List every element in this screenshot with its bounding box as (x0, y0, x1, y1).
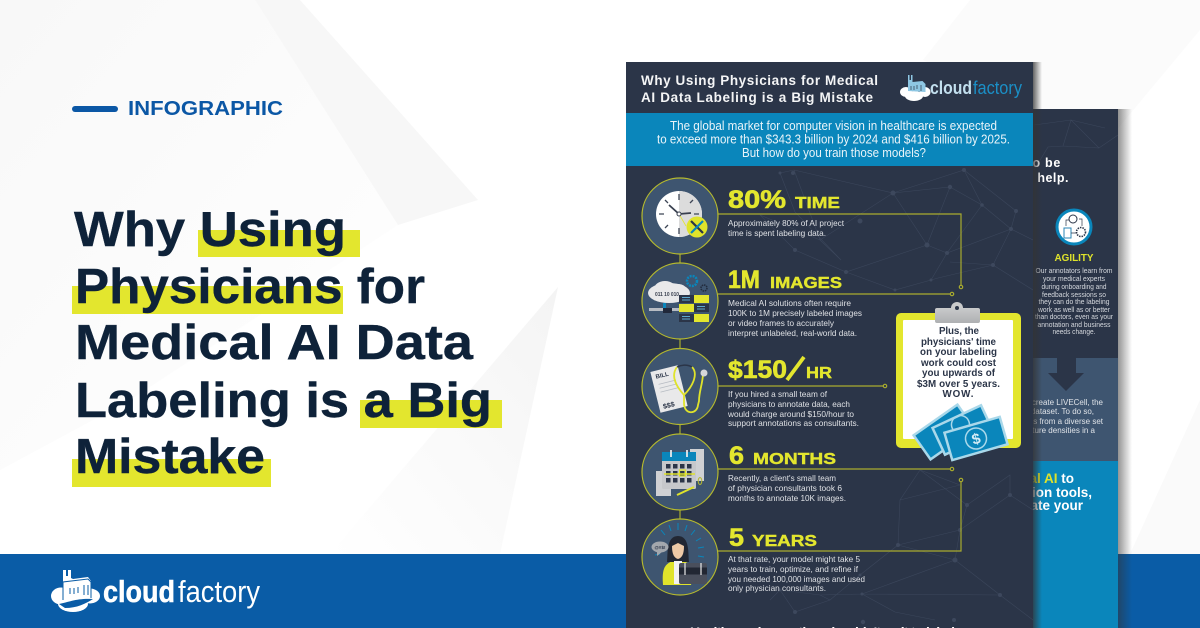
back page arrow section: dataset. To do so, (1031, 407, 1094, 416)
callout text: Plus, the (939, 326, 980, 337)
back page arrow section: s create LIVECell, the (1026, 398, 1104, 407)
agility text: feedback sessions so (1042, 290, 1106, 299)
icon: cloud and servers: 011 10 010 (655, 292, 679, 298)
main title with highlights: Physicians for (75, 260, 425, 314)
icon: dollar bills: $ (970, 430, 983, 449)
callout text: on your labeling (920, 347, 997, 358)
network pattern (760, 170, 1033, 620)
icon: bill and stethoscope: BILL (655, 372, 670, 381)
callout text: work could cost (920, 358, 997, 369)
item 1: 80% time (642, 178, 845, 254)
item 4: 6 months: of physician consultants took 6 (728, 483, 842, 493)
item 5: 5 years: only physician consultants. (728, 583, 826, 593)
main title with highlights (72, 203, 502, 487)
item 1: 80% time: 80% (728, 186, 786, 214)
agility text: during onboarding and (1042, 282, 1106, 291)
item 5: 5 years: 5 (729, 524, 744, 552)
intro band (626, 113, 1033, 166)
agility text: Our annotators learn from (1036, 266, 1112, 275)
icon: dollar bills (912, 403, 1009, 462)
agility text: annotation and business (1038, 320, 1111, 329)
item 4: 6 months: 6 (729, 442, 744, 470)
item 4: 6 months (642, 434, 846, 510)
agility text (1035, 253, 1113, 336)
agility text: needs change. (1052, 327, 1096, 336)
page heading: Why Using Physicians for Medical (641, 73, 878, 88)
intro band: to exceed more than $343.3 billion by 2024 and $416 billion by 2025. (657, 132, 1010, 146)
icon: clock with tools (642, 178, 718, 254)
item 4: 6 months: months to annotate 10K images. (728, 493, 846, 503)
back page call to action: ate your (1030, 498, 1084, 513)
item 5: 5 years: YEARS (752, 533, 817, 550)
item 1: 80% time: TIME (795, 195, 840, 212)
item 2: 1M images: or video frames to accurately (728, 318, 835, 328)
icon: bill and stethoscope (642, 348, 718, 424)
icon: cloud and servers (642, 263, 718, 339)
item 2: 1M images (642, 263, 862, 339)
item 2: 1M images: 100K to 1M precisely labeled images (728, 308, 862, 318)
header logo: cloudfactory (900, 75, 1022, 101)
agility text: AGILITY (1054, 253, 1094, 264)
item 3: $150/hr: If you hired a small team of (728, 389, 828, 399)
item 2: 1M images: IMAGES (770, 275, 842, 292)
footer band (0, 554, 1200, 628)
item 2: 1M images: 1M (728, 266, 760, 294)
item 5: 5 years (642, 519, 865, 595)
item 4: 6 months: Recently, a client's small team (728, 473, 836, 483)
front page of infographic (626, 62, 1033, 628)
item 1: 80% time: Approximately 80% of AI project (728, 218, 845, 228)
icon: consultant with briefcase: @#$! (655, 545, 666, 550)
agility text: than doctors, even as your (1035, 312, 1113, 321)
eyebrow: INFOGRAPHIC: INFOGRAPHIC (128, 98, 283, 120)
agility text: they can do the labeling (1038, 297, 1110, 306)
agility text: your medical experts (1043, 274, 1105, 283)
icon: agility (1057, 210, 1091, 244)
back page arrow section: ture densities in a (1032, 426, 1096, 435)
icon: bill and stethoscope: $$$ (662, 401, 676, 411)
callout text (917, 326, 1000, 400)
intro band: But how do you train those models? (742, 146, 926, 160)
callout text: WOW. (942, 389, 974, 400)
item 5: 5 years: At that rate, your model might take 5 (728, 554, 860, 564)
item 2: 1M images: Medical AI solutions often require (728, 298, 851, 308)
shadow behind back page (1118, 109, 1132, 628)
back page call to action: tion tools, (1028, 485, 1092, 500)
footer logo: cloudfactory: cloud (103, 574, 175, 609)
item 2: 1M images: interpret unlabeled, real-world data. (728, 328, 857, 338)
callout: clipboard (896, 302, 1021, 462)
back page arrow section (1026, 358, 1118, 461)
back page of infographic (1025, 109, 1118, 628)
agility text: work as well as or better (1037, 305, 1110, 314)
main title with highlights: Mistake (75, 430, 265, 484)
back page heading fragment: n help. (1025, 171, 1069, 185)
clipboard clasp (935, 302, 980, 323)
callout text: you upwards of (922, 368, 996, 379)
footer logo: cloudfactory (51, 570, 260, 612)
main title with highlights: Labeling is a Big (75, 374, 492, 428)
main title with highlights: Medical AI Data (75, 316, 474, 370)
back page heading fragment: to be (1028, 156, 1061, 170)
item 3: $150/hr: HR (806, 365, 833, 382)
item 3: $150/hr: support annotations as consultants. (728, 418, 859, 428)
icon: calendar and papers (642, 434, 718, 510)
shadow of front page (1033, 62, 1042, 628)
page heading (641, 73, 878, 105)
back page heading fragment (1033, 158, 1068, 184)
back page call to action: al AI to (1029, 471, 1074, 486)
footer logo: cloudfactory: factory (178, 574, 260, 609)
back page arrow section: ls from a diverse set (1031, 417, 1104, 426)
connectors (680, 214, 963, 551)
item 3: $150/hr: $150 (728, 356, 787, 384)
callout text: $3M over 5 years. (917, 379, 1000, 390)
item 5: 5 years: years to train, optimize, and refine if (728, 564, 859, 574)
item 3: $150/hr (642, 348, 859, 428)
item 1: 80% time: time is spent labeling data. (728, 228, 826, 238)
item 3: $150/hr: would charge around $150/hour to (727, 409, 854, 419)
header logo: cloudfactory: factory (973, 78, 1022, 98)
main title with highlights: Why Using (74, 203, 346, 257)
intro band: The global market for computer vision in healthcare is expected (670, 119, 997, 133)
eyebrow: INFOGRAPHIC (72, 98, 283, 120)
page heading: AI Data Labeling is a Big Mistake (641, 90, 873, 105)
item 3: $150/hr: physicians to annotate data, each (728, 399, 850, 409)
callout text: physicians' time (921, 337, 997, 348)
back page call to action (1028, 461, 1118, 628)
item 4: 6 months: MONTHS (753, 451, 836, 468)
item 5: 5 years: you needed 100,000 images and used (728, 574, 865, 584)
icon: consultant with briefcase (642, 519, 718, 595)
header logo: cloudfactory: cloud (930, 78, 972, 98)
